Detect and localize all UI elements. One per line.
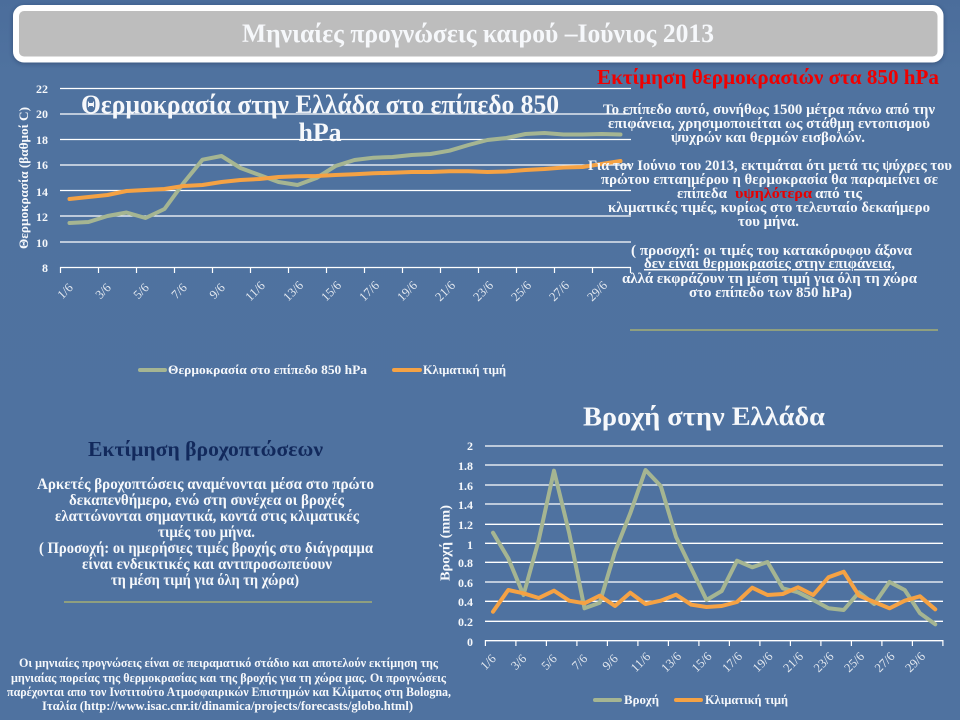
rainfall x axis labels: 15/6 <box>689 649 714 675</box>
temperature x axis labels: 25/6 <box>508 278 534 304</box>
rainfall x axis labels: 3/6 <box>508 652 529 673</box>
temperature y axis labels: 14 <box>36 185 48 199</box>
rainfall y axis labels: 1 <box>467 538 473 552</box>
temperature y axis labels: 8 <box>42 261 48 275</box>
temperature x axis labels <box>55 278 610 304</box>
rainfall x axis labels: 9/6 <box>600 652 621 673</box>
text block: rainfall explanation: τιμές του μήνα. <box>158 524 255 541</box>
rainfall climatological value series <box>493 572 935 612</box>
text block: temperature explanation <box>588 102 952 301</box>
rainfall legend <box>595 692 788 707</box>
text block: temperature explanation: επίπεδα <box>677 186 728 202</box>
text block: rainfall explanation: ( Προσοχή: οι ημερήσιες τιμές βροχής στο διάγραμμα <box>39 540 373 557</box>
temperature x axis labels: 1/6 <box>55 281 76 302</box>
temperature x axis labels: 17/6 <box>356 278 382 304</box>
temperature chart title: Θερμοκρασία στην Ελλάδα στο επίπεδο 850 <box>81 90 559 119</box>
temperature x axis labels: 21/6 <box>432 278 458 304</box>
rainfall y axis labels: 0.4 <box>458 595 473 609</box>
temperature y axis labels: 10 <box>36 236 48 250</box>
text block: temperature explanation: πρώτου επταημέρου η θερμοκρασία θα παραμείνει σε <box>601 172 939 188</box>
rainfall y axis title: Βροχή (mm) <box>438 505 454 581</box>
rainfall x axis labels: 29/6 <box>902 649 928 675</box>
text block: rainfall explanation: Αρκετές βροχοπτώσεις αναμένονται μέσα στο πρώτο <box>37 476 374 493</box>
rainfall x axis labels: 23/6 <box>811 649 836 675</box>
rainfall y axis labels: 0 <box>467 635 473 649</box>
text block: temperature explanation: αλλά εκφράζουν τη μέση τιμή για όλη τη χώρα <box>622 271 918 287</box>
temperature x axis labels: 29/6 <box>584 278 610 304</box>
temperature legend <box>140 362 506 377</box>
temperature x axis labels: 27/6 <box>546 278 572 304</box>
panel: 850 hPa temperature estimate <box>588 65 952 301</box>
rainfall x axis labels: 25/6 <box>841 649 867 675</box>
temperature series <box>70 133 620 223</box>
rainfall x axis labels: 17/6 <box>719 649 745 675</box>
climatological value series <box>70 161 620 199</box>
text block: source note: Ιταλία (http://www.isac.cnr.it/dinamica/projects/forecasts/globo.html) <box>42 699 413 713</box>
text block: temperature explanation: κλιματικές τιμές, κυρίως στο τελευταίο δεκαήμερο <box>608 200 930 216</box>
rainfall y axis labels: 0.2 <box>458 615 473 629</box>
text block: temperature explanation: Το επίπεδο αυτό, συνήθως 1500 μέτρα πάνω από την <box>603 102 935 118</box>
temperature x axis labels: 11/6 <box>243 279 268 304</box>
rainfall x axis labels: 27/6 <box>872 649 897 675</box>
text block: source note <box>7 656 451 713</box>
rainfall chart title: Βροχή στην Ελλάδα <box>583 402 826 431</box>
text block: rainfall explanation: δεκαπενθήμερο, ενώ στη συνέχεα οι βροχές <box>69 492 344 509</box>
rainfall y axis labels: 0.8 <box>458 556 473 570</box>
temperature x axis labels: 9/6 <box>207 281 228 302</box>
temperature chart title: hPa <box>298 118 342 147</box>
text block: temperature explanation: ψυχρών και θερμών εισβολών. <box>671 130 865 146</box>
line chart: temperature at 850 hPa <box>17 82 631 377</box>
temperature legend: Κλιματική τιμή <box>423 362 506 377</box>
text block: rainfall explanation <box>37 476 374 589</box>
temperature y axis labels <box>36 82 48 275</box>
rainfall legend: Βροχή <box>624 692 659 707</box>
temperature x axis labels: 15/6 <box>318 278 344 304</box>
rainfall x axis labels: 5/6 <box>539 652 560 673</box>
text block: temperature explanation: από τις <box>815 186 863 202</box>
temperature x axis labels: 5/6 <box>131 281 152 302</box>
panel: rainfall estimate <box>37 437 374 589</box>
temperature chart title <box>81 90 559 147</box>
text block: rainfall explanation: τη μέση τιμή για όλη τη χώρα) <box>111 572 299 589</box>
rainfall y axis labels: 1.4 <box>458 498 473 512</box>
rainfall series <box>493 470 935 624</box>
text block: source note: μηνιαίας πορείας της θερμοκρασίας και της βροχής για τη χώρα μας. Οι προγνώσεις <box>11 671 447 685</box>
temperature y axis labels: 22 <box>36 82 48 96</box>
rainfall y axis labels: 0.6 <box>458 576 473 590</box>
temperature y axis labels: 16 <box>36 158 48 172</box>
rainfall y axis labels: 1.2 <box>458 518 473 532</box>
rainfall y axis labels <box>458 439 473 649</box>
text block: rainfall explanation: είναι ενδεικτικές και αντιπροσωπεύουν <box>82 556 332 573</box>
rainfall legend: Κλιματική τιμή <box>705 692 788 707</box>
temperature y axis labels: 12 <box>36 210 48 224</box>
temperature y axis labels: 20 <box>36 107 48 121</box>
title: Μηνιαίες προγνώσεις καιρού –Ιούνιος 2013 <box>242 19 714 48</box>
text block: temperature explanation: Για τον Ιούνιο του 2013, εκτιμάται ότι μετά τις ψύχρες του <box>588 158 952 174</box>
temperature x axis labels: 3/6 <box>93 281 114 302</box>
rainfall y axis labels: 2 <box>467 439 473 453</box>
temperature x axis labels: 19/6 <box>394 278 420 304</box>
rainfall x axis labels: 7/6 <box>569 652 590 673</box>
text block: temperature explanation: επιφάνεια, χρησιμοποιείται ως στάθμη εντοπισμού <box>608 116 930 132</box>
rainfall y axis labels: 1.6 <box>458 479 473 493</box>
text block: temperature explanation: του μήνα. <box>738 214 799 230</box>
heading: temperature estimate: Εκτίμηση θερμοκρασιών στα 850 hPa <box>597 65 939 89</box>
rainfall x axis labels: 13/6 <box>658 649 684 675</box>
text block: source note: παρέχονται απο τον Ινστιτούτο Ατμοσφαιρικών Επιστημών και Κλίματος στη Bologna, <box>7 685 451 699</box>
line chart: rainfall <box>438 402 943 707</box>
temperature x axis labels: 7/6 <box>169 281 190 302</box>
temperature legend: Θερμοκρασία στο επίπεδο 850 hPa <box>168 362 368 377</box>
rainfall x axis labels: 1/6 <box>478 652 499 673</box>
rainfall x axis labels: 11/6 <box>628 650 653 675</box>
rainfall x axis labels <box>478 649 928 675</box>
temperature x axis labels: 13/6 <box>280 278 306 304</box>
text block: temperature explanation: ( προσοχή: οι τιμές του κατακόρυφου άξονα <box>631 243 913 259</box>
temperature y axis title: Θερμοκρασία (βαθμοί C) <box>17 107 31 249</box>
title banner <box>16 8 940 60</box>
rainfall x axis labels: 21/6 <box>780 649 806 675</box>
temperature y axis labels: 18 <box>36 133 48 147</box>
temperature x axis labels: 23/6 <box>470 278 496 304</box>
rainfall x axis labels: 19/6 <box>750 649 775 675</box>
heading: rainfall estimate: Εκτίμηση βροχοπτώσεων <box>88 437 324 461</box>
text block: temperature explanation: υψηλότερα <box>735 186 813 202</box>
text block: temperature explanation: στο επίπεδο των 850 hPa) <box>689 285 852 301</box>
text block: temperature explanation: δεν είναι θερμοκρασίες στην επιφάνεια, <box>644 256 895 272</box>
text block: rainfall explanation: ελαττώνονται σημαντικά, κοντά στις κλιματικές <box>55 508 359 525</box>
rainfall y axis labels: 1.8 <box>458 459 473 473</box>
text block: source note: Οι μηνιαίες προγνώσεις είναι σε πειραματικό στάδιο και αποτελούν εκτίμηση της <box>19 656 439 670</box>
